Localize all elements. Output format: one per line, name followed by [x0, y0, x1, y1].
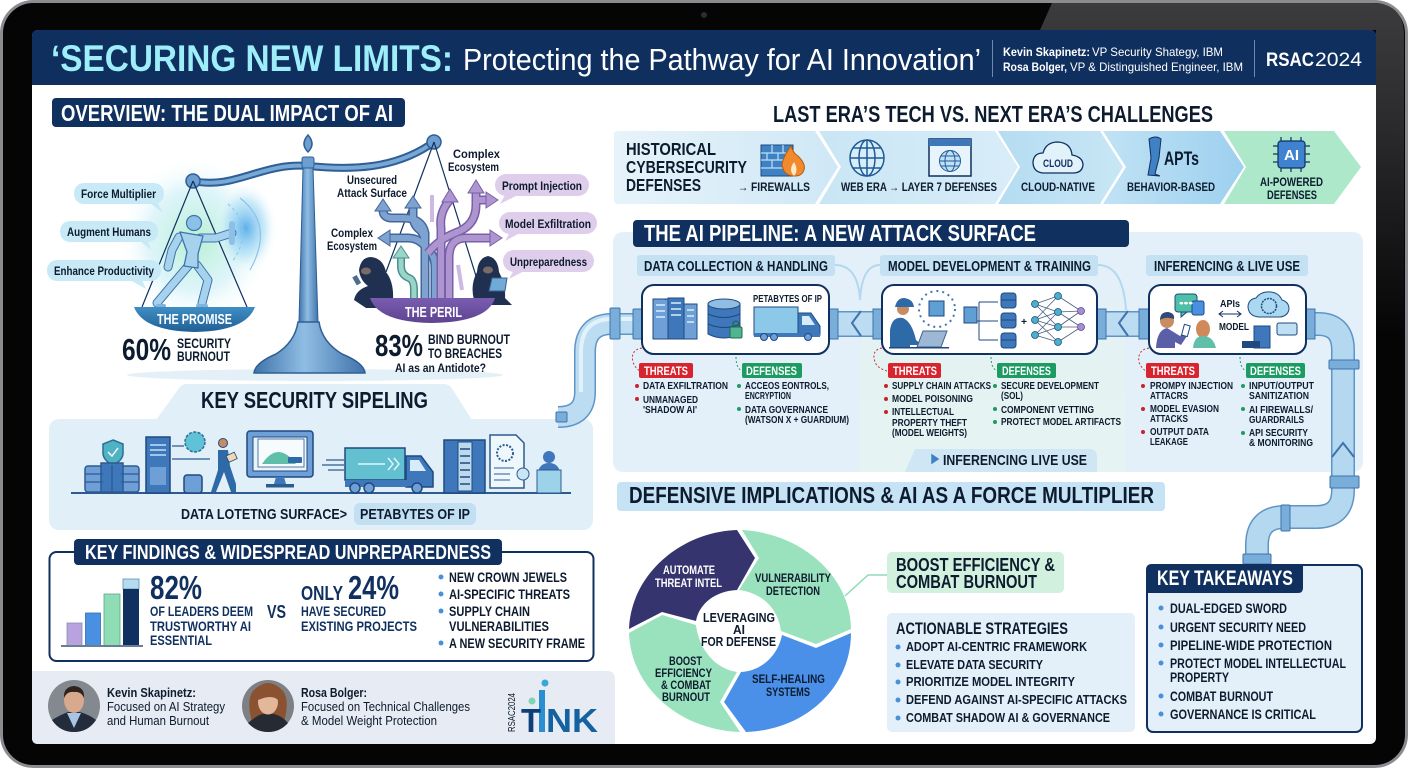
callout: boost efficiency: [845, 552, 1064, 596]
panel: evolution chevrons: [614, 131, 1361, 204]
defense list: ENCRYPTION: [745, 390, 791, 402]
peril statistic: BIND BURNOUT: [428, 331, 510, 347]
caption: DATA LOTETNG SURFACE>: [181, 506, 347, 523]
segment: self-healing systems: [724, 633, 851, 732]
tag: defenses: DEFENSES: [1002, 364, 1051, 378]
defense list: SANITIZATION: [1249, 390, 1309, 402]
findings list: [438, 570, 585, 651]
defense list: AI FIREWALLS/: [1249, 404, 1313, 416]
threat list: OUTPUT DATA: [1150, 426, 1209, 438]
icon: firewall: [761, 145, 804, 176]
threat list: MODEL POISONING: [892, 393, 973, 405]
icon: robot: [157, 216, 232, 306]
tag: threats: THREATS: [893, 364, 937, 378]
peril labels: Unsecured: [347, 173, 397, 187]
tab: inferencing live use: [905, 449, 1097, 472]
heading: [1146, 564, 1303, 593]
peril labels: Complex: [331, 226, 373, 240]
heading: KEY FINDINGS & WIDESPREAD UNPREPAREDNESS: [85, 542, 491, 564]
title: [51, 38, 981, 79]
speakers credit: Rosa Bolger,: [1003, 60, 1067, 74]
tag: threats: THREATS: [1151, 364, 1195, 378]
findings list: AI-SPECIFIC THREATS: [449, 587, 570, 602]
threat list: MODEL EVASION: [1150, 403, 1219, 415]
hub label: LEVERAGING: [703, 610, 775, 625]
speaker text: Rosa: Rosa Bolger:: [301, 685, 367, 700]
tag: defenses: DEFENSES: [1250, 364, 1301, 378]
takeaways list: PROTECT MODEL INTELLECTUAL: [1170, 656, 1346, 671]
segment: vulnerability detection: [739, 530, 851, 644]
segment: boost efficiency: BOOST: [669, 656, 702, 668]
icon: engineer: [211, 438, 237, 492]
peril statistic: TO BREACHES: [428, 345, 502, 361]
chevron: AI powered: DEFENSES: [1267, 188, 1317, 202]
balance scale: [186, 135, 441, 373]
panel: actionable strategies: COMBAT SHADOW AI & GOVERNANCE: [906, 710, 1110, 725]
defense list: ACCEOS EONTROLS,: [745, 380, 829, 392]
icon: hooded figure right: [473, 256, 512, 305]
RSAC logo: 2024: [1315, 50, 1362, 71]
defense list: PROTECT MODEL ARTIFACTS: [1001, 416, 1121, 428]
peril labels: [327, 147, 500, 253]
callout: boost efficiency: COMBAT BURNOUT: [896, 572, 1037, 592]
panel: key takeaways: [1146, 564, 1362, 732]
icon: data stacks: [1001, 293, 1016, 348]
heading: defensive implications: DEFENSIVE IMPLICATIONS & AI AS A FORCE MULTIPLIER: [629, 482, 1154, 508]
portrait: Rosa: [242, 680, 294, 732]
title: ‘SECURING NEW LIMITS:: [51, 38, 453, 79]
RSAC logo: [1266, 50, 1362, 71]
icon: model cloud: [1242, 292, 1297, 348]
segment: automate threat intel: AUTOMATE: [663, 565, 715, 577]
bubble: enhance productivity: Enhance Productivity: [54, 264, 154, 278]
stage: inferencing: [1139, 255, 1314, 449]
promise statistic: BURNOUT: [177, 348, 230, 364]
the promise pan: THE PROMISE: [157, 312, 232, 328]
icon: globe: [850, 140, 884, 176]
segment: boost efficiency: BURNOUT: [662, 692, 710, 704]
icon: monitor: [247, 431, 313, 488]
findings list: VULNERABILITIES: [449, 619, 549, 634]
stat: 82 percent: [150, 569, 253, 648]
icon: server tower: [146, 432, 210, 493]
peril labels: Complex: [453, 147, 500, 161]
takeaways list: PIPELINE-WIDE PROTECTION: [1170, 638, 1332, 653]
logo: RSAC Think: T: [521, 702, 541, 739]
stage: model development: +: [1021, 317, 1027, 328]
defense list: [993, 380, 1121, 428]
callout: boost efficiency: BOOST EFFICIENCY &: [896, 555, 1055, 575]
hub label: AI: [733, 622, 745, 637]
takeaways list: [1158, 601, 1346, 722]
speaker text: Kevin: and Human Burnout: [107, 713, 209, 728]
logo: RSAC Think: [507, 680, 598, 739]
panel: actionable strategies: PRIORITIZE MODEL INTEGRITY: [906, 674, 1075, 689]
icon: threat lure: [1148, 137, 1161, 176]
icon: users with chat: •••: [1179, 298, 1193, 308]
stat: 82 percent: TRUSTWORTHY AI: [150, 618, 251, 634]
chevron: behavior based: BEHAVIOR-BASED: [1127, 180, 1215, 194]
speakers credit: VP Security Shategy, IBM: [1092, 45, 1223, 59]
threat list: INTELLECTUAL: [892, 406, 954, 418]
stat: 24 percent: HAVE SECURED: [301, 603, 386, 619]
icon: circuit chip: [919, 291, 977, 327]
tag: threats: THREATS: [644, 364, 688, 378]
bubble: force multiplier: Force Multiplier: [81, 187, 156, 201]
RSAC logo: RSAC: [1266, 50, 1314, 71]
icon: document: [490, 435, 529, 488]
bubble: unpreparedness: Unpreparedness: [510, 255, 587, 269]
takeaways list: PROPERTY: [1170, 670, 1229, 685]
chevron: cloud native: CLOUD-NATIVE: [1021, 180, 1095, 194]
chevron: historical firewalls: CYBERSECURITY: [626, 157, 747, 177]
portrait: Kevin: [48, 680, 100, 732]
chevron: behavior based: APTs: [1164, 149, 1199, 170]
APIs and model labels: [1219, 299, 1249, 333]
stat: 82 percent: OF LEADERS DEEM: [150, 603, 253, 619]
threat list: (MODEL WEIGHTS): [892, 427, 967, 439]
icon: branching threat arrows: [383, 190, 492, 300]
defense list: GUARDRAILS: [1249, 414, 1304, 426]
APIs and model labels: APIs: [1220, 299, 1240, 310]
threat list: [635, 380, 728, 416]
stage: data collection: DATA COLLECTION & HANDLING: [644, 259, 828, 275]
defense list: INPUT/OUTPUT: [1249, 380, 1314, 392]
icon: speed lines: [322, 460, 344, 470]
heading: last era versus next era: LAST ERA’S TECH VS. NEXT ERA’S CHALLENGES: [773, 101, 1213, 127]
peril statistic: 83%: [375, 328, 423, 363]
speaker text: Kevin: Focused on AI Strategy: [107, 699, 225, 714]
segment: boost efficiency: & COMBAT: [661, 680, 711, 692]
bubble: prompt injection: Prompt Injection: [502, 179, 582, 193]
segment: vulnerability detection: DETECTION: [766, 586, 820, 598]
icon: developer at laptop: [889, 298, 949, 348]
panel: actionable strategies: DEFEND AGAINST AI-SPECIFIC ATTACKS: [906, 692, 1127, 707]
stat: 82 percent: ESSENTIAL: [150, 632, 212, 648]
versus label: VS: [267, 602, 286, 622]
defense list: [737, 380, 849, 426]
chevron: historical firewalls: HISTORICAL: [626, 139, 716, 159]
caption: [181, 503, 476, 525]
logo: RSAC Think: RSAC2024: [507, 693, 518, 732]
peril bubbles: [495, 174, 597, 279]
threat list: PROPERTY THEFT: [892, 417, 967, 429]
caption: PETABYTES OF IP: [360, 506, 470, 523]
tab: inferencing live use: INFERENCING LIVE USE: [943, 452, 1087, 469]
APIs and model labels: MODEL: [1219, 322, 1249, 333]
header banner: [32, 30, 1376, 85]
findings list: SUPPLY CHAIN: [449, 604, 530, 619]
findings list: A NEW SECURITY FRAME: [449, 636, 585, 651]
threat list: 'SHADOW AI': [643, 404, 697, 416]
icon: cloud: CLOUD: [1043, 158, 1073, 170]
bar chart: [61, 579, 143, 647]
icon: neural network: [1032, 292, 1084, 346]
chevron: AI powered: AI-POWERED: [1260, 175, 1323, 189]
speakers credit: [1003, 45, 1243, 74]
peril statistic: AI as an Antidote?: [395, 361, 486, 375]
findings list: NEW CROWN JEWELS: [449, 570, 567, 585]
speaker text: Rosa: Focused on Technical Challenges: [301, 699, 470, 714]
panel: speakers footer: [32, 671, 615, 744]
the promise pan: [134, 181, 255, 332]
threat list: UNMANAGED: [643, 394, 698, 406]
icon: browser window: [929, 139, 971, 176]
takeaways list: COMBAT BURNOUT: [1170, 689, 1274, 704]
stat: 82 percent: 82%: [150, 569, 202, 606]
takeaways list: URGENT SECURITY NEED: [1170, 620, 1306, 635]
stat: 24 percent: ONLY: [301, 583, 344, 605]
threat list: PROMPY INJECTION: [1150, 380, 1233, 392]
panel: overview dual impact: [47, 98, 597, 381]
panel: AI pipeline: [556, 220, 1363, 564]
stage: data collection: PETABYTES OF IP: [753, 294, 822, 305]
threat list: DATA EXFILTRATION: [643, 380, 728, 392]
icon: servers: [653, 298, 697, 339]
threat list: [1141, 380, 1233, 448]
chevron: web era: [819, 131, 1018, 204]
segment: self-healing systems: SYSTEMS: [766, 687, 810, 699]
threat list: SUPPLY CHAIN ATTACKS: [892, 380, 991, 392]
icon: users with chat: [1156, 294, 1216, 348]
logo: RSAC Think: NK: [546, 702, 598, 739]
title: Protecting the Pathway for AI Innovation’: [463, 42, 981, 77]
bubble: augment humans: Augment Humans: [67, 225, 151, 239]
tag: defenses: DEFENSES: [746, 364, 797, 378]
promise statistic: 60%: [122, 332, 171, 367]
icon: AI chip: AI: [1284, 147, 1299, 164]
speakers credit: Kevin Skapinetz:: [1003, 45, 1090, 59]
chevron: historical firewalls: → FIREWALLS: [738, 180, 810, 194]
peril labels: Attack Surface: [337, 186, 407, 200]
speaker text: Kevin: [107, 685, 225, 728]
stage: inferencing: INFERENCING & LIVE USE: [1154, 259, 1300, 275]
the peril pan: THE PERIL: [405, 305, 462, 321]
stat: 24 percent: EXISTING PROJECTS: [301, 618, 417, 634]
promise statistic: SECURITY: [177, 335, 231, 351]
segment: automate threat intel: THREAT INTEL: [655, 578, 722, 590]
defense list: DATA GOVERNANCE: [745, 404, 828, 416]
stage: model development: [874, 255, 1121, 439]
panel: actionable strategies: ACTIONABLE STRATEGIES: [896, 619, 1068, 638]
icon: data truck: [754, 307, 820, 340]
threat list: LEAKAGE: [1150, 436, 1188, 448]
stage: model development: MODEL DEVELOPMENT & TRAINING: [888, 259, 1091, 275]
panel: actionable strategies: ELEVATE DATA SECURITY: [906, 657, 1043, 672]
pipe: inlet and connectors: [558, 319, 1343, 558]
icon: truck: [345, 448, 433, 493]
promise statistic: [122, 332, 231, 367]
segment: automate threat intel: [629, 530, 755, 629]
segment: self-healing systems: SELF-HEALING: [752, 674, 825, 686]
defense list: API SECURITY: [1249, 427, 1308, 439]
panel: key findings: [50, 539, 594, 661]
defense list: (SOL): [1001, 390, 1023, 402]
hub label: [701, 610, 776, 649]
stage: data collection: [632, 255, 849, 426]
heading: KEY TAKEAWAYS: [1157, 567, 1293, 590]
pipeline heading: THE AI PIPELINE: A NEW ATTACK SURFACE: [644, 220, 1036, 246]
chevron: historical firewalls: [614, 131, 838, 204]
panel: actionable strategies: [887, 613, 1135, 732]
bubble: model exfiltration: Model Exfiltration: [505, 217, 591, 231]
panel: key security pipeline: [49, 384, 593, 530]
the peril pan: [352, 142, 512, 323]
stat: 24 percent: [301, 569, 417, 634]
segment: boost efficiency: [629, 615, 740, 732]
icon: hooded figure left: [352, 257, 394, 308]
segment: boost efficiency: EFFICIENCY: [655, 668, 712, 680]
icon: seated operator: [537, 451, 561, 493]
peril labels: Ecosystem: [448, 160, 499, 174]
icon: database cluster: [85, 440, 139, 492]
threat list: ATTACKS: [1150, 413, 1188, 425]
hub label: FOR DEFENSE: [701, 634, 776, 649]
speakers credit: VP & Distinguished Engineer, IBM: [1070, 60, 1243, 74]
promise bubbles: [47, 183, 164, 289]
takeaways list: GOVERNANCE IS CRITICAL: [1170, 707, 1316, 722]
chevron: behavior based: [1103, 131, 1244, 204]
peril statistic: [375, 328, 510, 375]
takeaways list: DUAL-EDGED SWORD: [1170, 601, 1287, 616]
defense list: & MONITORING: [1249, 437, 1313, 449]
defense list: COMPONENT VETTING: [1001, 404, 1094, 416]
defense list: SECURE DEVELOPMENT: [1001, 380, 1099, 392]
icon: rack: [444, 440, 485, 493]
threat list: [884, 380, 991, 439]
speaker text: Rosa: & Model Weight Protection: [301, 713, 437, 728]
panel: actionable strategies: ADOPT AI-CENTRIC FRAMEWORK: [906, 639, 1088, 654]
peril labels: Ecosystem: [327, 239, 377, 253]
chevron: web era: WEB ERA → LAYER 7 DEFENSES: [841, 180, 997, 194]
defense list: (WATSON X + GUARDIUM): [745, 414, 849, 426]
speaker text: Kevin: Kevin Skapinetz:: [107, 685, 196, 700]
threat list: ATTACRS: [1150, 390, 1188, 402]
segment: vulnerability detection: VULNERABILITY: [755, 573, 831, 585]
stat: 24 percent: 24%: [348, 569, 399, 606]
chevron: AI powered: [1224, 131, 1361, 204]
speaker text: Rosa: [301, 685, 470, 728]
cycle diagram: leveraging AI: [629, 530, 851, 732]
chevron: cloud native: [998, 131, 1123, 204]
defense list: [1241, 380, 1314, 449]
heading: KEY SECURITY SIPELING: [201, 387, 428, 413]
chevron: historical firewalls: DEFENSES: [626, 175, 701, 195]
overview heading: OVERVIEW: THE DUAL IMPACT OF AI: [61, 100, 393, 126]
icon: locked database: [708, 299, 742, 338]
